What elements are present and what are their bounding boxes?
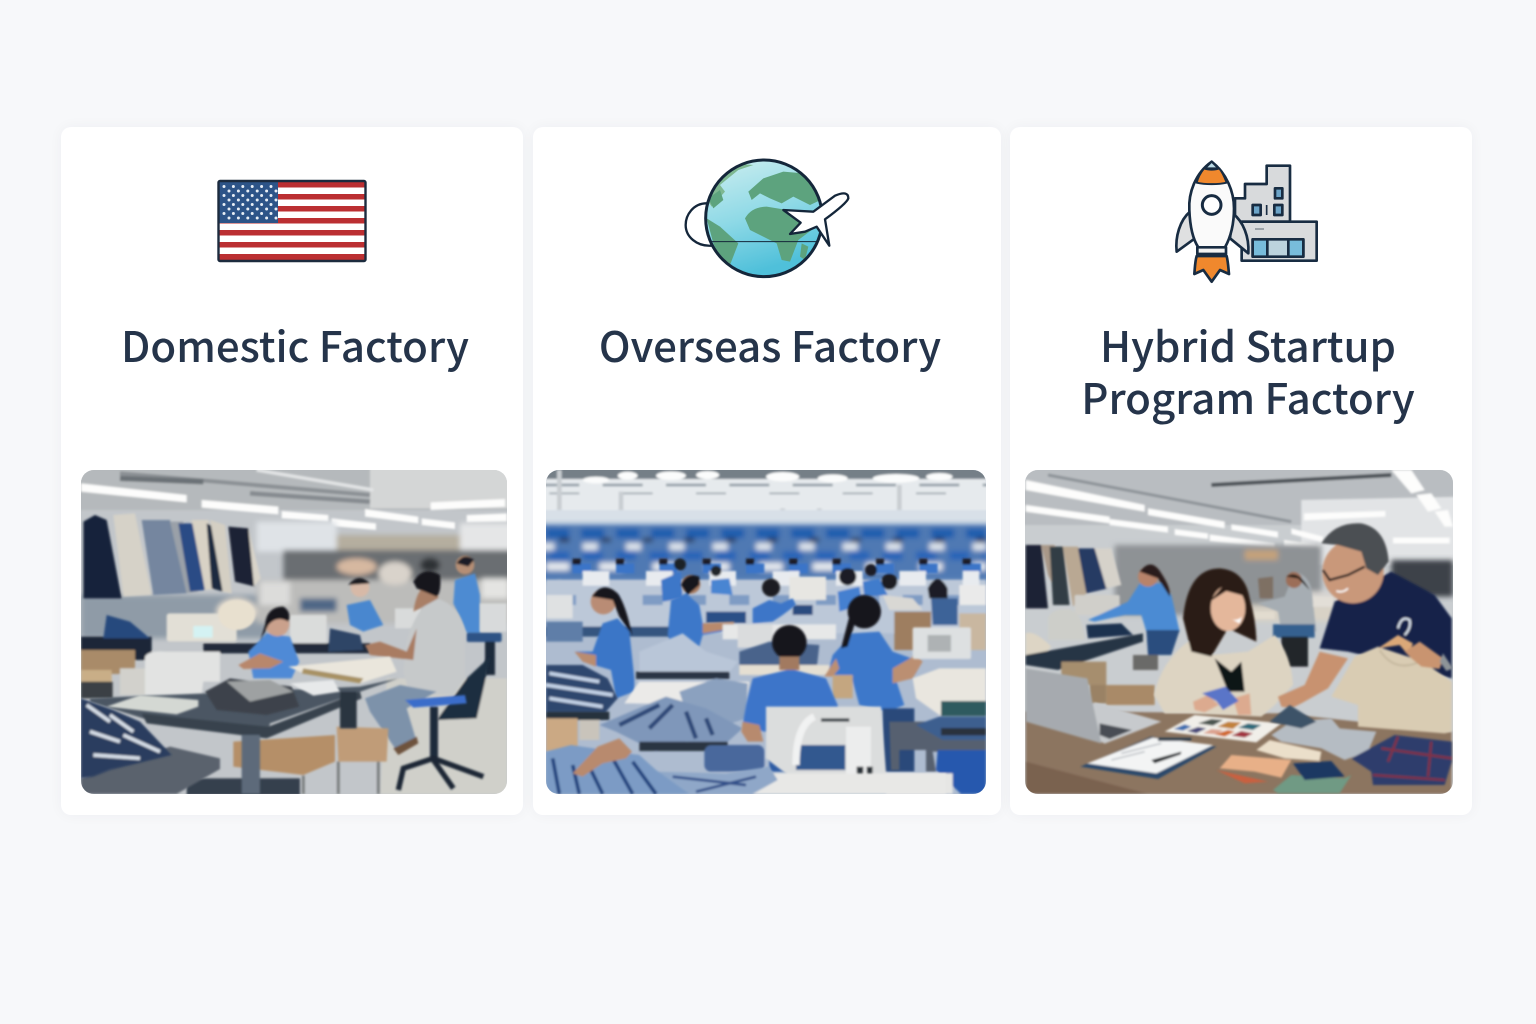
table items	[107, 657, 397, 715]
background workspace and rack	[1115, 545, 1453, 622]
panel: domestic factory	[61, 127, 523, 815]
table surface	[1026, 712, 1452, 794]
background workers	[347, 556, 502, 675]
machines and desks	[81, 600, 507, 698]
ceiling lights	[539, 465, 989, 582]
heading: domestic factory: Domestic Factory	[121, 314, 469, 375]
clipboard with pen	[1080, 737, 1216, 779]
woman with tablet	[1154, 568, 1293, 717]
icon: rocket and factory	[1175, 160, 1318, 284]
photo: domestic garment factory floor	[81, 470, 507, 794]
mid-row workers	[574, 575, 836, 698]
heading: hybrid startup program factory	[1081, 314, 1415, 427]
man with t-shirt sample	[1278, 523, 1452, 708]
heading: overseas factory: Overseas Factory	[599, 314, 941, 375]
ceiling and lights	[1015, 465, 1465, 565]
panel: overseas factory	[546, 158, 986, 794]
photo: overseas mass-production floor	[546, 470, 986, 794]
ceiling and lights	[70, 465, 520, 530]
swatch sheet	[1165, 715, 1281, 742]
crowd of workers in blue	[539, 524, 989, 581]
striped fabric pile	[81, 698, 172, 778]
seated worker in blue	[238, 607, 299, 678]
work table	[81, 678, 398, 794]
background workspace	[81, 522, 520, 638]
floor and chair area	[380, 657, 507, 794]
right tables and stacks	[886, 627, 986, 794]
fabric piles	[546, 622, 849, 752]
bottom foreground fabric and arm	[546, 738, 946, 794]
clothes rack	[83, 513, 261, 598]
fabric samples	[1216, 705, 1452, 793]
panel: hybrid startup program factory	[1010, 127, 1472, 815]
sewing machine	[751, 707, 891, 790]
icon: globe with airplane	[684, 158, 850, 278]
right foreground worker	[824, 595, 923, 772]
center foreground worker	[704, 625, 844, 772]
icon: american flag	[217, 180, 367, 262]
cardboard boxes	[187, 727, 388, 795]
photo: designer and factory partner reviewing samples	[1025, 470, 1453, 794]
worker in gray shirt	[365, 571, 483, 790]
heading: hybrid startup program factory: Program Factory	[1081, 366, 1415, 427]
laptop	[1026, 668, 1161, 744]
heading: hybrid startup program factory: Hybrid Startup	[1100, 314, 1396, 375]
